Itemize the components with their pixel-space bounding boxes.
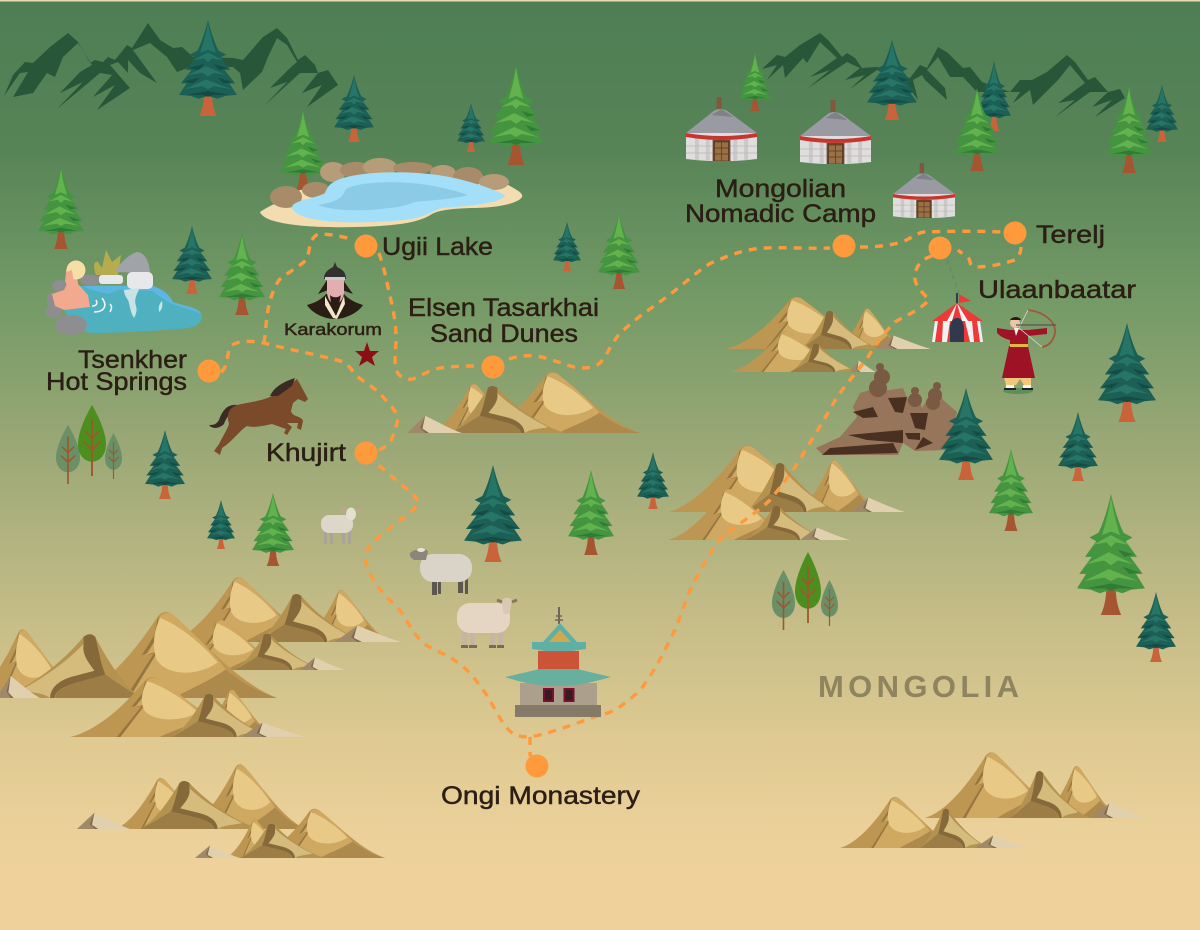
plant xyxy=(94,250,121,275)
horse xyxy=(209,378,308,455)
label: Tsenkher Hot Springs: Tsenkher xyxy=(78,346,187,374)
label: Khujirt: Khujirt xyxy=(266,439,346,467)
Karakorum ruler icon xyxy=(307,262,363,319)
label: Mongolian Nomadic Camp: Nomadic Camp xyxy=(685,200,876,228)
cream sheep xyxy=(457,598,517,648)
deciduous trees: left group xyxy=(56,405,122,484)
label: Elsen Tasarkhai Sand Dunes: Elsen Tasarkhai xyxy=(408,294,599,322)
rock formation xyxy=(816,363,957,455)
label: Terelj: Terelj xyxy=(1036,221,1105,249)
boulders xyxy=(270,158,509,208)
Tsenkher Hot Springs illustration xyxy=(46,250,202,335)
deciduous trees: right group xyxy=(772,552,838,630)
route: dashed travel path xyxy=(221,231,1021,758)
tree overlapping the rock formation xyxy=(939,388,993,480)
label: Elsen Tasarkhai Sand Dunes: Sand Dunes xyxy=(430,320,578,348)
mountains: top right range xyxy=(762,33,1125,117)
water xyxy=(292,172,505,222)
walls xyxy=(520,683,597,705)
forest: dark pine trees xyxy=(145,20,1178,662)
mountains: top left range xyxy=(4,23,338,110)
label: Mongolian Nomadic Camp xyxy=(685,175,876,228)
archer xyxy=(997,310,1056,394)
sand shore xyxy=(260,180,522,227)
lower roof xyxy=(505,669,611,686)
white stones xyxy=(99,272,153,289)
label: Karakorum: Karakorum xyxy=(284,320,382,339)
dunes: centre right xyxy=(668,445,905,540)
face xyxy=(327,280,344,304)
helmet xyxy=(324,262,346,279)
label: Ugii Lake: Ugii Lake xyxy=(382,233,493,261)
red wall xyxy=(538,651,579,670)
connector: Ulaanbaatar marker to tent xyxy=(947,260,960,296)
steam xyxy=(124,288,140,318)
hair flares xyxy=(318,280,353,294)
dunes: bottom left xyxy=(77,764,385,858)
dunes: near Ulaanbaatar xyxy=(726,297,931,372)
base xyxy=(515,705,601,717)
label: Elsen Tasarkhai Sand Dunes xyxy=(408,294,599,348)
dunes: large left range xyxy=(0,577,402,737)
monastery: Ongi xyxy=(505,607,611,717)
tent: Ulaanbaatar xyxy=(932,293,983,342)
label: Tsenkher Hot Springs: Hot Springs xyxy=(46,368,187,396)
label: MONGOLIA: MONGOLIA xyxy=(818,669,1019,704)
upper roof xyxy=(543,623,577,642)
label: Tsenkher Hot Springs xyxy=(46,346,187,396)
yurts: Mongolian Nomadic Camp xyxy=(686,97,955,218)
dunes: Elsen Tasarkhai xyxy=(407,372,640,433)
beard xyxy=(330,295,341,310)
cloak xyxy=(307,294,363,319)
Ugii Lake illustration xyxy=(260,158,522,227)
label: Ongi Monastery: Ongi Monastery xyxy=(441,782,641,810)
small sheep xyxy=(321,508,360,544)
collar xyxy=(325,296,345,319)
label: Mongolian Nomadic Camp: Mongolian xyxy=(715,175,846,203)
woolly sheep xyxy=(410,548,472,595)
windows xyxy=(543,688,554,702)
bather xyxy=(52,284,90,310)
forest: light pine trees xyxy=(38,53,1152,615)
label: Ulaanbaatar: Ulaanbaatar xyxy=(978,276,1136,304)
dunes: bottom right xyxy=(840,752,1148,848)
spire xyxy=(558,607,560,624)
rocks xyxy=(46,274,100,335)
pool xyxy=(60,285,202,333)
star: Karakorum xyxy=(355,342,379,366)
route stops xyxy=(198,222,1026,778)
grey boulder xyxy=(115,252,150,273)
